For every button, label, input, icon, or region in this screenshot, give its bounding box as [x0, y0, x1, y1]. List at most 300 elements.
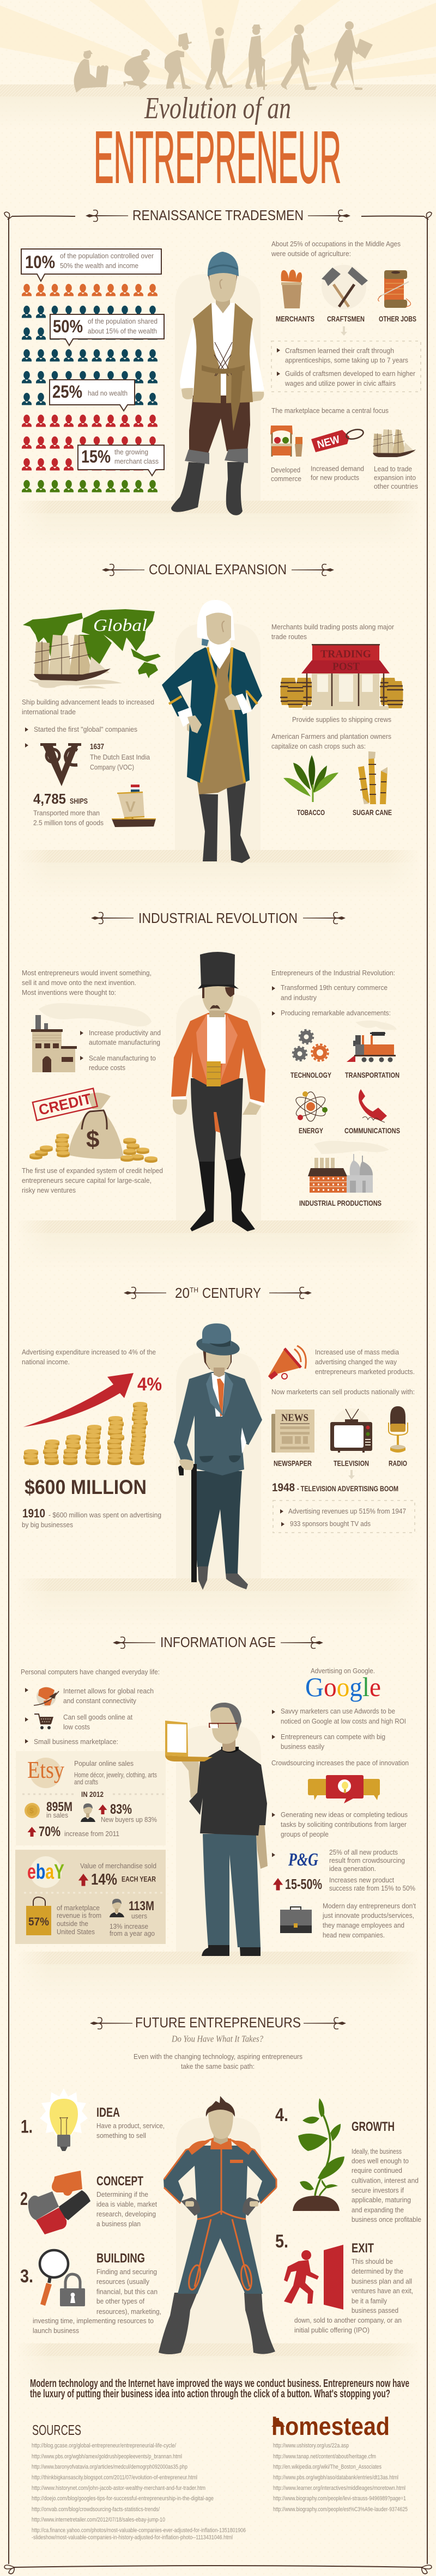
text: industrial entrepreneurs: Producing remarkable advancements: [281, 1009, 391, 1017]
step 1: idea: Have a product, service, [96, 2122, 165, 2130]
icon: factory [31, 1003, 152, 1072]
text: personal computers: low costs [63, 1723, 90, 1731]
text: credit: risky new ventures [22, 1186, 76, 1194]
text: ship building: international trade [22, 708, 76, 716]
text: modern entrepreneurs: Modern day entrepreneurs don't [323, 1901, 416, 1910]
panel: eBay: users [131, 1912, 147, 1920]
arrow: down [348, 1470, 355, 1479]
stat: 600 million: $600 MILLION [25, 1476, 147, 1498]
text: inventions [22, 969, 152, 997]
step 2: concept: a business plan [96, 2220, 141, 2228]
text: Dutch East India Company: 1637 [90, 742, 104, 751]
panel: craftsmen notes: apprenticeships, some taking up to 7 years [285, 356, 408, 364]
step 2: concept: CONCEPT [96, 2174, 143, 2189]
icon: coin: $ [29, 1806, 34, 1815]
callout: 10 percent: 50% the wealth and income [60, 262, 138, 270]
step 4: growth [275, 2098, 421, 2223]
captions: marketplace: other countries [374, 482, 418, 490]
text: P&G stats: success rate from 15% to 50% [329, 1884, 415, 1892]
section backdrop: industrial arch [16, 994, 420, 1268]
section backdrop: renaissance arch [16, 274, 420, 549]
heading: Renaissance Tradesmen: RENAISSANCE TRADESMEN [132, 207, 304, 223]
step 2: concept [20, 2171, 157, 2234]
sources list: right [273, 2443, 408, 2513]
icon: trading post: POST [332, 660, 360, 672]
panel: Etsy: 83% [110, 1802, 132, 1817]
text: P&G stats: Increases new product [329, 1876, 394, 1884]
step 4: growth: Ideally, the business [352, 2147, 402, 2155]
silhouette: laptop [330, 21, 373, 90]
icon: globe [34, 1687, 59, 1706]
icon: big ship [34, 635, 111, 681]
text: occupations intro [271, 240, 401, 258]
figure: information age entrepreneur [165, 1703, 268, 1956]
figure: colonial merchant [162, 600, 262, 863]
heading: 20th Century: TH [190, 1286, 198, 1294]
text: google bullets [271, 1707, 409, 1767]
text: google bullets: business easily [281, 1742, 324, 1751]
step 2: concept: idea is viable, market [96, 2200, 157, 2208]
heading: Future Entrepreneurs: FUTURE ENTREPRENEURS [135, 2014, 301, 2031]
people rows: 50 percent [22, 306, 158, 405]
text: ship building: Ship building advancement leads to increased [22, 698, 154, 706]
text: supplies and crops: Provide supplies to shipping crews [292, 715, 391, 724]
section backdrop: future arch [16, 2117, 420, 2391]
section backdrop: information arch [16, 1726, 420, 2000]
text: future intro [134, 2052, 302, 2070]
text: invention bullets: Scale manufacturing to [89, 1054, 156, 1062]
stat: 600 million [22, 1476, 161, 1529]
arrow: down [341, 326, 347, 336]
text: credit: The first use of expanded system of credit helped [22, 1167, 163, 1175]
step 1: idea [21, 2088, 165, 2151]
step 3: building: financial, but this can [96, 2287, 158, 2296]
step 3: building: Finding and securing [96, 2268, 157, 2276]
icon: magnifier and lock [40, 2250, 85, 2306]
labels: technology and transportation [290, 1071, 399, 1079]
text: personal computers: Small business marketplace: [34, 1737, 118, 1746]
people row: 15 percent [22, 480, 158, 493]
text: modern entrepreneurs: they manage employees and [323, 1921, 404, 1929]
icon: atom [293, 1091, 328, 1121]
panel: eBay: outside the [57, 1919, 88, 1928]
captions: marketplace: expansion into [374, 473, 416, 482]
panel: television stats: Advertising revenues up 515% from 1947 [288, 1507, 406, 1515]
callout: 25 percent: had no wealth [88, 389, 128, 397]
labels: technology and transportation: TRANSPORTATION [345, 1071, 399, 1079]
step 3: building: be other types of [96, 2297, 144, 2305]
labels: occupations: MERCHANTS [276, 314, 314, 323]
callout: 15 percent: 15% [81, 447, 111, 466]
text: invention bullets: automate manufacturing [89, 1038, 160, 1046]
text: advertising expenditure: Advertising expenditure increased to 4% of the [22, 1348, 156, 1356]
panel: craftsmen notes: Craftsmen learned their craft through [285, 347, 394, 355]
step 2: concept: research, developing [96, 2210, 156, 2218]
icon: gears [293, 1030, 328, 1061]
step 5: exit: down, sold to another company, or an [294, 2316, 402, 2324]
silhouette: crouching [123, 49, 150, 90]
text: credit [22, 1167, 163, 1194]
icon: plant [293, 2098, 344, 2211]
panel: eBay: revenue is from [57, 1911, 101, 1919]
label: industrial productions: INDUSTRIAL PRODUCTIONS [299, 1199, 382, 1207]
sources list: right: http://www.pbs.org/wgbh/aso/databank/entries/dt13as.html [273, 2475, 398, 2481]
silhouette: top hat [165, 33, 192, 89]
text: television boom: - TELEVISION ADVERTISING BOOM [297, 1484, 398, 1493]
text: mass media [271, 1348, 415, 1396]
text: modern entrepreneurs [322, 1901, 416, 1939]
icon: train [347, 1020, 397, 1062]
text: P&G stats: idea generation. [329, 1864, 376, 1873]
icon: industrial buildings [308, 1141, 389, 1193]
icon: speech bubbles with idea [308, 1775, 380, 1803]
text: google bullets: Savvy marketers can use Adwords to be [281, 1707, 395, 1715]
figure: renaissance tradesman [171, 252, 264, 515]
heading: 20th Century [124, 1285, 312, 1301]
logo: P&G: P&G [288, 1850, 318, 1870]
text: mass media: advertising changed the way [315, 1358, 397, 1366]
text: trading posts [271, 623, 395, 641]
conclusion [30, 2378, 409, 2400]
heading: Colonial Expansion: COLONIAL EXPANSION [149, 561, 287, 578]
text: google bullets: Entrepreneurs can compete with big [281, 1733, 385, 1741]
callout: 50 percent: of the population shared [88, 317, 158, 325]
step 5: exit [275, 2231, 413, 2334]
text: future intro: take the same basic path: [181, 2062, 255, 2070]
step 5: exit: be it a family [352, 2297, 387, 2305]
stat: 4,785 ships: 4,785 [33, 791, 66, 807]
panel: Etsy: New buyers up 83% [101, 1815, 157, 1824]
sunburst header background [0, 0, 436, 129]
sources list: left: http://www.internetretailer.com/2012/07/18/sales-ebay-jump-10 [32, 2517, 165, 2523]
people row: 10 percent [22, 284, 158, 296]
icon: television [330, 1408, 372, 1453]
panel: Etsy: IN 2012 [81, 1790, 104, 1799]
labels: crops [297, 808, 392, 817]
captions: marketplace: Increased demand [311, 464, 364, 473]
callout: 15 percent [78, 445, 164, 476]
text: industrial entrepreneurs: and industry [281, 994, 317, 1001]
labels: energy and communications [299, 1126, 400, 1135]
captions: marketplace: for new products [311, 473, 359, 482]
labels: energy and communications: ENERGY [299, 1126, 324, 1135]
figure: future entrepreneur [159, 2096, 277, 2354]
map label: Global [93, 615, 147, 635]
callout: 25 percent [50, 380, 135, 411]
step 1: idea: IDEA [96, 2105, 120, 2120]
text: inventions: sell it and move onto the next invention. [22, 979, 136, 987]
panel: Etsy: Popular online sales [74, 1759, 134, 1767]
logo: homestead: homestead [271, 2412, 390, 2440]
icon: newspaper [271, 1409, 314, 1453]
heading: Industrial Revolution: INDUSTRIAL REVOLUTION [138, 910, 298, 926]
sources list: left: http://doejo.com/blog/googles-tips-for-successful-entrepreneurship-in-the-digital-age [32, 2495, 214, 2502]
heading: Information Age: INFORMATION AGE [160, 1634, 276, 1650]
icon: VOC ship: V [125, 798, 136, 815]
text: P&G stats: result from crowdsourcing [329, 1856, 405, 1864]
arrow: growth [23, 1373, 134, 1427]
panel: eBay: 13% increase [110, 1922, 148, 1930]
labels: crops: TOBACCO [297, 808, 325, 817]
text: Dutch East India Company [90, 742, 150, 771]
panel: television stats: 933 sponsors bought TV ads [290, 1520, 371, 1528]
sources list: left: -slideshow/most-valuable-companies-in-history-adjusted-for-inflation-photo--1113431046.html [32, 2535, 233, 2541]
silhouette: cane [245, 25, 267, 90]
step 4: growth: applicable, maturing [352, 2196, 411, 2204]
labels: media: RADIO [389, 1459, 407, 1468]
sources list: left: http://blog.gcase.org/global-entrepreneur/entrepreneurial-life-cycle/ [32, 2443, 177, 2449]
icon: new tag [311, 428, 365, 452]
panel: craftsmen notes [271, 341, 421, 392]
sources list: right: http://www.tanap.net/content/about/heritage.cfm [273, 2453, 376, 2460]
sources list: right: http://www.learner.org/interactives/middleages/moretown.html [273, 2485, 405, 2492]
panel: craftsmen notes: wages and utilize power in civic affairs [284, 379, 396, 387]
world map [23, 609, 161, 689]
text: supplies and crops [271, 715, 391, 750]
stat: 600 million: by big businesses [22, 1521, 73, 1529]
panel: eBay: 14% [91, 1871, 117, 1888]
icon: trading post: TRADING [320, 648, 371, 660]
icon: coin [25, 1803, 40, 1818]
subtitle: Do You Have What It Takes? [171, 2033, 263, 2044]
step 4: growth: 4. [275, 2105, 288, 2125]
icon: megaphone [268, 1346, 306, 1380]
stat: 600 million: - $600 million was spent on advertising [49, 1511, 161, 1519]
step 4: growth: does well enough to [352, 2156, 409, 2165]
text: marketplace: The marketplace became a central focus [271, 406, 389, 415]
logo: eBay: ebaY [27, 1861, 64, 1884]
text: modern entrepreneurs: just innovate products/services, [322, 1911, 414, 1919]
panel: eBay: 113M [129, 1899, 154, 1913]
chart: coin stacks with growth arrow [23, 1373, 162, 1465]
text: invention bullets: Increase productivity and [89, 1029, 161, 1037]
silhouette: merchant seated [74, 50, 108, 93]
callout: 10 percent: 10% [25, 252, 55, 272]
text: personal computers [21, 1668, 160, 1746]
icon: trading post [280, 644, 403, 710]
icon: briefcase [280, 1907, 312, 1933]
step 2: concept: 2 [20, 2189, 28, 2209]
panel: Etsy: in sales [46, 1811, 68, 1819]
step 2: concept: Determining if the [96, 2190, 148, 2198]
section backdrop: colonial arch [16, 623, 420, 898]
step 1: idea: 1. [21, 2116, 33, 2137]
panel: Etsy: 895M [46, 1800, 72, 1814]
icon: money bag with credit stamp: $ [86, 1126, 99, 1153]
sources list: left [32, 2443, 246, 2541]
icon: laptop [165, 1721, 213, 1761]
labels: media [274, 1459, 407, 1468]
step 3: building: investing time, implementing resources to [33, 2317, 154, 2325]
sources list: left: http://www.historynet.com/john-jacob-astor-wealthy-merchant-and-fur-trader.htm [32, 2485, 205, 2492]
stat: 600 million: 1910 [22, 1506, 45, 1520]
text: mass media: Now marketerts can sell products nationally with: [271, 1388, 415, 1396]
text: credit: entrepreneurs secure capital for large-scale, [22, 1176, 152, 1184]
step 5: exit: ventures have an exit, [352, 2287, 413, 2295]
text: occupations intro: About 25% of occupations in the Middle Ages [271, 240, 401, 248]
icon: bread basket [281, 270, 302, 308]
text: google bullets: Crowdsourcing increases the pace of innovation [271, 1759, 409, 1767]
step 3: building [20, 2250, 161, 2335]
text: crowdsourcing: groups of people [281, 1830, 329, 1838]
text: inventions: Most entrepreneurs would invent something, [22, 969, 152, 977]
sources list: right: http://en.wikipedia.org/wiki/The_Boston_Associates [273, 2464, 382, 2470]
icon: sailing ship [373, 429, 416, 457]
evolution silhouettes [74, 21, 373, 93]
callout: 50 percent: 50% [53, 317, 83, 336]
text: future intro: Even with the changing technology, aspiring entrepreneurs [134, 2052, 302, 2061]
icon: tobacco [283, 755, 338, 802]
step 3: building: launch business [33, 2326, 79, 2335]
text: invention bullets [80, 1029, 161, 1072]
callout: 10 percent: of the population controlled over [60, 252, 154, 260]
panel: eBay [15, 1850, 166, 1944]
panel: eBay: EACH YEAR [122, 1874, 156, 1883]
callout: 50 percent [50, 314, 164, 345]
step 5: exit: business plan and all [352, 2277, 412, 2285]
sources list: left: http://ca.finance.yahoo.com/photos/most-valuable-companies-ever-adjusted-for-inflation-1351801906 [32, 2527, 246, 2534]
icon: money bag with credit stamp [29, 1089, 158, 1163]
panel: Etsy: increase from 2011 [64, 1830, 119, 1838]
text: crowdsourcing: tasks by soliciting contributions from larger [281, 1820, 407, 1828]
text: modern entrepreneurs: head new companies. [323, 1931, 385, 1939]
sources heading: SOURCES [32, 2422, 81, 2438]
step 3: building: resources (usually [96, 2277, 149, 2286]
stat: 4,785 ships: Transported more than [33, 809, 100, 817]
logo: VOC [40, 743, 81, 786]
text: ship building [22, 698, 154, 748]
icon: crossed hammers [322, 265, 368, 309]
title [94, 92, 341, 198]
population pictogram [22, 284, 158, 493]
step 5: exit: This should be [352, 2257, 393, 2265]
labels: crops: SUGAR CANE [353, 808, 392, 817]
icon: shopping bag: 57% [28, 1916, 49, 1928]
text: industrial entrepreneurs [271, 969, 395, 1017]
panel: craftsmen notes: Guilds of craftsmen developed to earn higher [285, 369, 416, 378]
text: crowdsourcing [272, 1811, 408, 1857]
callout: 50 percent: about 15% of the wealth [88, 327, 157, 335]
sources list: left: http://thinkbigkansascity.blogspot.com/2011/07/evolution-of-entrepreneur.html [32, 2475, 197, 2481]
panel: Etsy: Etsy [27, 1757, 64, 1783]
captions: marketplace [271, 464, 418, 490]
text: supplies and crops: American Farmers and plantation owners [271, 732, 391, 740]
stat: 4,785 ships: 2.5 million tons of goods [33, 818, 104, 827]
text: personal computers: Can sell goods online at [63, 1713, 132, 1721]
text: personal computers: Internet allows for global reach [63, 1687, 154, 1695]
captions: marketplace: Lead to trade [374, 465, 412, 473]
sources list: left: http://www.baronyofvatavia.org/articles/medcul/demogrph092000as35.php [32, 2464, 187, 2470]
step 3: building: BUILDING [96, 2251, 145, 2265]
labels: occupations [276, 314, 416, 323]
callout: 15 percent: the growing [114, 448, 148, 456]
panel: Etsy: 70% [39, 1824, 60, 1839]
text: occupations intro: were outside of agriculture: [271, 250, 351, 258]
labels: occupations: CRAFTSMEN [327, 314, 365, 323]
silhouette: walking [281, 25, 317, 90]
step 5: exit: determined by the [352, 2267, 403, 2275]
logo: Google: Google [305, 1672, 381, 1702]
text: P&G stats: 15-50% [285, 1876, 322, 1892]
heading: 20th Century: CENTURY [202, 1285, 261, 1301]
step 4: growth: GROWTH [352, 2119, 395, 2134]
panel: eBay: from a year ago [110, 1929, 155, 1937]
text: mass media: Increased use of mass media [315, 1348, 399, 1356]
text: personal computers: and constant connectivity [63, 1697, 136, 1705]
labels: technology and transportation: TECHNOLOGY [290, 1071, 332, 1079]
panel: eBay: of marketplace [57, 1904, 100, 1912]
section backdrop: 20th century arch [16, 1352, 420, 1626]
text: trading posts: trade routes [271, 633, 307, 641]
text: advertising expenditure [22, 1348, 156, 1366]
step 1: idea: something to sell [96, 2131, 146, 2140]
title: Evolution of an [144, 92, 291, 125]
callout: 25 percent: 25% [52, 382, 82, 402]
step 5: exit: business passed [352, 2306, 398, 2314]
labels: media: TELEVISION [334, 1459, 369, 1468]
text: Dutch East India Company: Company (VOC) [90, 763, 134, 771]
icon: VOC ship [112, 785, 156, 827]
people rows: 25 percent [22, 415, 158, 471]
text: Dutch East India Company: The Dutch East India [90, 753, 150, 761]
callout: 10 percent [21, 249, 161, 281]
stat: 4,785 ships [33, 791, 104, 827]
text: mass media: entrepreneurs marketed products. [315, 1368, 415, 1376]
step 4: growth: business once profitable [352, 2215, 421, 2223]
labels: occupations: OTHER JOBS [379, 314, 416, 323]
step 3: building: 3. [20, 2266, 33, 2287]
text: invention bullets: reduce costs [89, 1064, 125, 1072]
icon: sugar cane [358, 751, 387, 804]
step 4: growth: require continued [352, 2166, 402, 2174]
icon: telephone [359, 1089, 387, 1122]
step 3: building: resources), marketing, [96, 2307, 161, 2316]
figure: industrial entrepreneur [171, 952, 265, 1231]
figure: 20th century businessman [174, 1323, 262, 1590]
icon: market stall [270, 426, 302, 457]
panel: eBay: Value of merchandise sold [80, 1862, 156, 1870]
icon: radio microphone [389, 1406, 408, 1453]
text: google bullets: noticed on Google at low costs and high ROI [281, 1717, 406, 1725]
text: television boom: 1948 [272, 1481, 295, 1494]
step 5: exit: 5. [275, 2231, 288, 2252]
stat: 4,785 ships: SHIPS [70, 797, 88, 805]
icon: new tag: NEW [316, 434, 341, 451]
panel: Etsy [16, 1751, 166, 1845]
step 4: growth: and expanding the [352, 2206, 404, 2214]
sources list: right: http://www.ushistory.org/us/22a.asp [273, 2443, 349, 2449]
icon: thread spool [378, 270, 411, 308]
step 4: growth: cultivation, interest and [352, 2176, 419, 2185]
sources list: left: http://www.pbs.org/wgbh/amex/goldrush/peopleevents/p_brannan.html [32, 2453, 182, 2460]
labels: energy and communications: COMMUNICATIONS [344, 1126, 400, 1135]
step 4: growth: secure investors if [352, 2186, 404, 2195]
text: P&G stats: 25% of all new products [329, 1848, 398, 1856]
text: television boom [272, 1481, 398, 1494]
icon: shopping cart [34, 1714, 53, 1729]
icon: puzzle [28, 2171, 90, 2234]
captions: marketplace: Developed [271, 466, 300, 474]
icon: exit door [284, 2245, 343, 2310]
text: industrial entrepreneurs: Entrepreneurs of the Industrial Revolution: [271, 969, 395, 977]
text: P&G stats [273, 1848, 415, 1892]
captions: marketplace: commerce [271, 475, 301, 483]
heading: Information Age [113, 1634, 323, 1650]
icon: light bulb [40, 2088, 88, 2151]
icon: newspaper: NEWS [281, 1412, 308, 1424]
step 5: exit: EXIT [352, 2241, 374, 2256]
panel: television stats [273, 1500, 415, 1533]
